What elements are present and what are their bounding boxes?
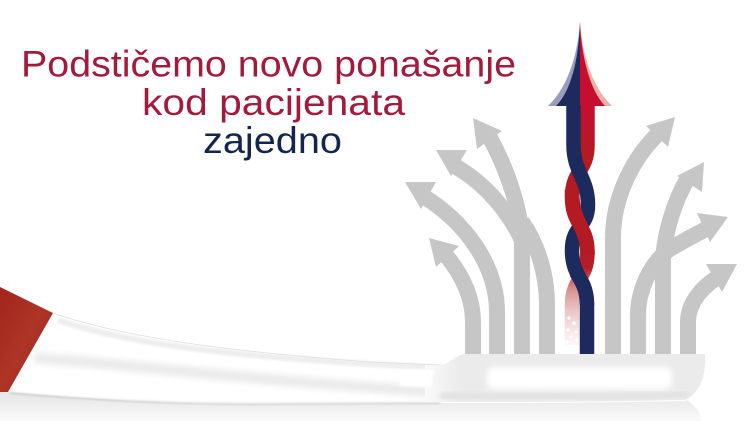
pale arrowhead left side xyxy=(548,22,580,106)
toothbrush head xyxy=(400,354,705,402)
arrowhead navy half xyxy=(556,22,580,106)
grey arrow 1 xyxy=(429,238,473,354)
red ribbon xyxy=(572,105,588,345)
toothbrush red band xyxy=(0,287,53,392)
title line 3: zajedno xyxy=(203,120,342,161)
title line 2: kod pacijenata xyxy=(142,82,405,123)
grey arrow 3 with branch xyxy=(436,118,522,354)
navy ribbon lower crossing xyxy=(576,272,587,305)
floor shadow xyxy=(0,392,702,421)
grey arrow 4 xyxy=(522,222,547,354)
dissolving particles xyxy=(565,316,579,344)
grey arrows right xyxy=(613,117,737,354)
title xyxy=(21,44,516,161)
arrowhead red half xyxy=(580,22,605,106)
grey arrow 7 with branch xyxy=(662,162,728,354)
red ribbon crossing xyxy=(572,190,588,255)
grey arrow 2 xyxy=(405,182,497,354)
grey arrow 8 xyxy=(688,264,737,354)
pale arrowhead right side xyxy=(580,22,612,106)
title line 1: Podstičemo novo ponašanje xyxy=(21,44,516,84)
navy ribbon xyxy=(572,105,588,354)
toothbrush xyxy=(0,287,705,404)
grey arrow 6 xyxy=(638,250,668,354)
grey arrows left xyxy=(405,118,547,354)
toothbrush handle xyxy=(0,287,705,404)
grey arrow 5 xyxy=(613,117,675,354)
central twisted arrow xyxy=(548,22,612,354)
